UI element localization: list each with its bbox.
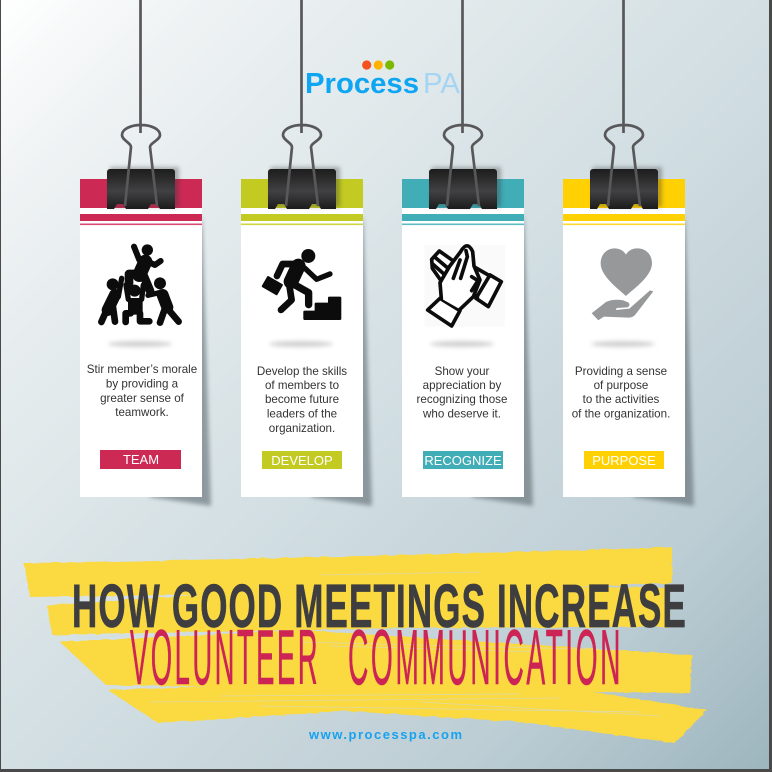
text block: by providing a [106, 378, 179, 390]
panel: recognize [402, 179, 533, 506]
text block: become future [265, 393, 339, 406]
icon: running up stairs [261, 249, 340, 319]
logo [305, 60, 461, 100]
tag: purpose [584, 451, 664, 469]
text block: of members to [265, 379, 339, 392]
binder clip 4 [590, 0, 662, 209]
text block: recognizing those [417, 393, 507, 406]
text block: leaders of the [267, 408, 337, 420]
dry brush streaks [75, 572, 660, 716]
binder clip 3 [429, 0, 501, 209]
icon: clapping hands [424, 245, 505, 327]
ground shadow [591, 341, 655, 347]
binder clip 2 [268, 0, 340, 209]
tag: develop [262, 451, 342, 469]
icon: heart in hand [592, 248, 653, 320]
ground shadow [430, 341, 494, 347]
text block: of purpose [594, 379, 648, 392]
panel: team [80, 179, 211, 506]
logo: PA [423, 68, 461, 100]
text block: appreciation by [423, 379, 502, 392]
binder clip 1 [107, 0, 179, 209]
ground shadow [269, 341, 333, 347]
text block: of the organization. [572, 408, 670, 420]
icon: team of people lifting [101, 244, 179, 323]
text block: Providing a sense [575, 365, 667, 378]
title: line 2: VOLUNTEER [130, 613, 320, 701]
text block: teamwork. [115, 406, 169, 419]
tag: recognize: RECOGNIZE [424, 453, 502, 468]
tag: develop: DEVELOP [271, 453, 333, 468]
text block: to the activities [583, 393, 660, 406]
text block: who deserve it. [422, 408, 501, 420]
text block: Show your [435, 365, 490, 378]
tag: purpose: PURPOSE [592, 453, 656, 468]
text block: greater sense of [100, 392, 185, 405]
text block: Develop the skills [257, 365, 347, 378]
panel: develop [241, 179, 372, 506]
tag: team: TEAM [123, 452, 159, 467]
ground shadow [108, 341, 172, 347]
website: www.processpa.com [308, 727, 462, 742]
yellow brush strokes [24, 547, 707, 743]
text block: Stir member’s morale [87, 363, 197, 376]
text block: organization. [269, 422, 335, 435]
panel: purpose [563, 179, 694, 506]
logo: Process [305, 68, 419, 100]
tag: team [100, 450, 181, 469]
